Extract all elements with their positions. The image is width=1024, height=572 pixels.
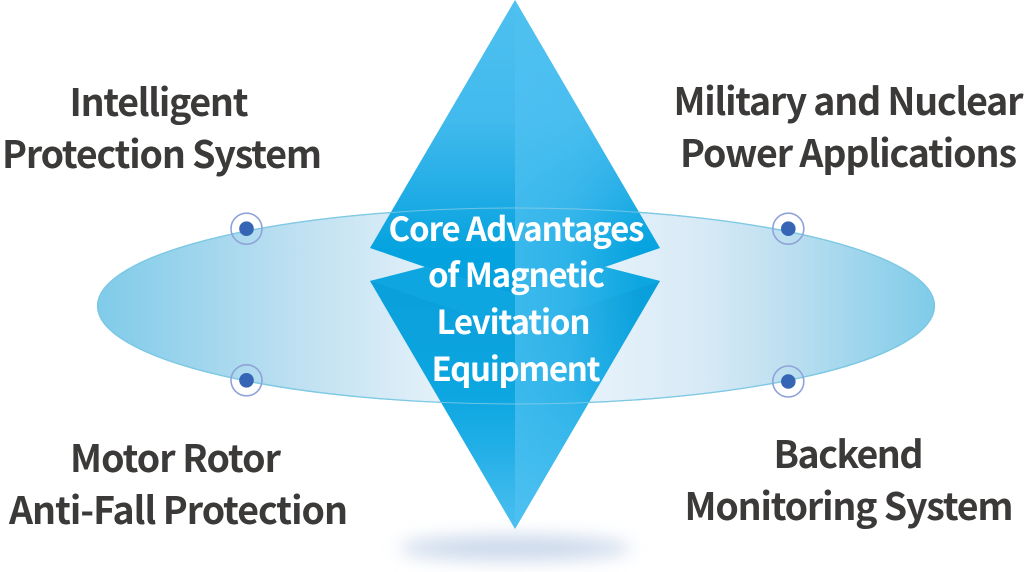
heading: Intelligent Protection System: Protection System bbox=[2, 124, 322, 179]
heading: Motor Rotor Anti-Fall Protection: Anti-Fall Protection bbox=[8, 480, 348, 535]
center title: Equipment bbox=[432, 343, 601, 391]
heading: Intelligent Protection System: Intelligent bbox=[70, 72, 249, 127]
heading: Military and Nuclear Power Applications: Power Applications bbox=[680, 123, 1017, 178]
heading: Military and Nuclear Power Applications: Military and Nuclear bbox=[674, 71, 1024, 126]
center title: Levitation bbox=[436, 296, 590, 344]
heading: Military and Nuclear Power Applications bbox=[674, 71, 1024, 178]
center title bbox=[388, 203, 644, 391]
center title: Core Advantages bbox=[388, 203, 644, 251]
marker: bottom right bbox=[773, 366, 804, 397]
heading: Intelligent Protection System bbox=[2, 72, 322, 179]
diamond bbox=[370, 0, 660, 529]
marker: top right bbox=[773, 213, 804, 244]
ellipse edge lines over diamond bbox=[98, 208, 934, 404]
heading: Backend Monitoring System bbox=[684, 424, 1014, 531]
heading: Backend Monitoring System: Backend bbox=[774, 424, 924, 479]
ellipse ring bbox=[98, 208, 934, 404]
heading: Motor Rotor Anti-Fall Protection bbox=[8, 428, 348, 535]
center title: of Magnetic bbox=[428, 249, 605, 297]
heading: Motor Rotor Anti-Fall Protection: Motor Rotor bbox=[70, 428, 282, 483]
heading: Backend Monitoring System: Monitoring System bbox=[684, 476, 1014, 531]
marker: top left bbox=[231, 213, 262, 244]
marker: bottom left bbox=[231, 365, 262, 396]
floor shadow bbox=[399, 536, 631, 560]
